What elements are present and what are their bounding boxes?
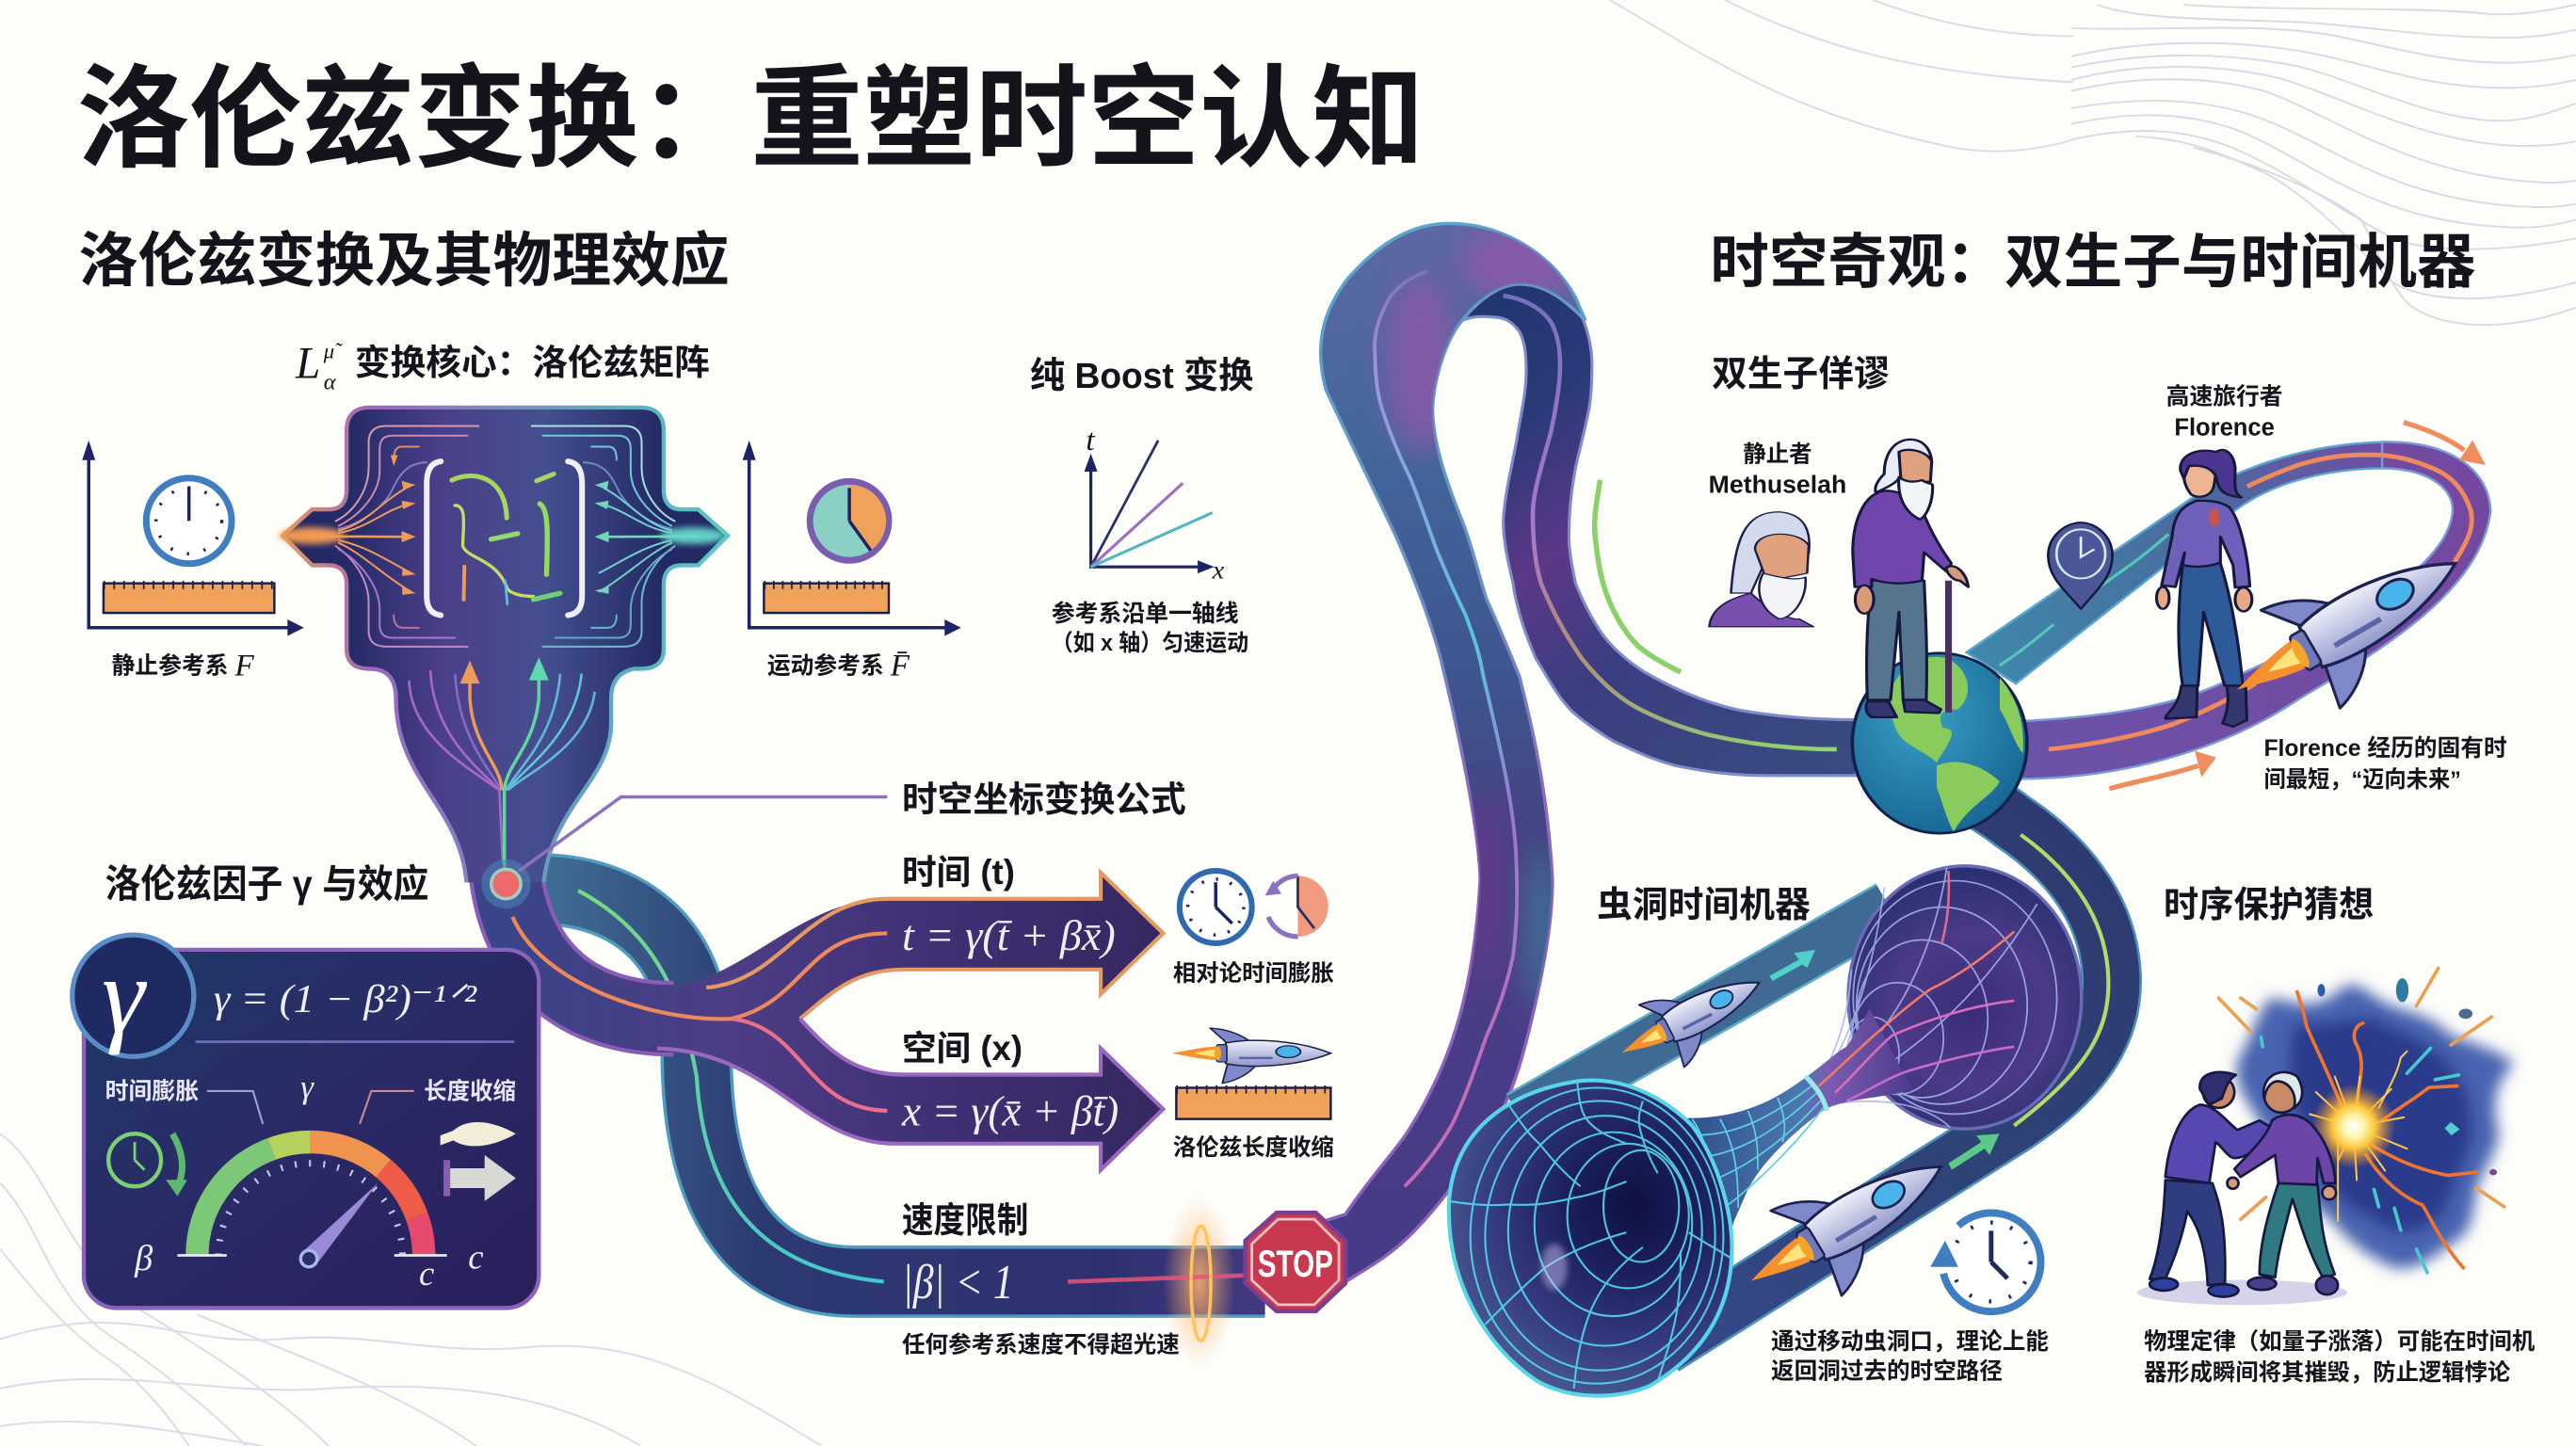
matrix entries xyxy=(452,474,560,604)
leader line xyxy=(519,797,887,871)
matrix heading: 变换核心：洛伦兹矩阵 xyxy=(355,343,710,382)
purple sheen on loop xyxy=(1385,227,1582,1010)
ruler ticks xyxy=(104,583,274,587)
light barrier xyxy=(1068,1197,1297,1367)
stop sign: STOP xyxy=(1258,1243,1333,1285)
gamma badge xyxy=(72,935,194,1056)
formula: γ = (1 − β²)⁻¹ᐟ² xyxy=(214,978,478,1021)
heading: twin paradox: 双生子佯谬 xyxy=(1712,355,1890,394)
explosion: shards xyxy=(2219,968,2504,1219)
left flow lines xyxy=(320,426,478,647)
axis labels: β xyxy=(134,1239,153,1278)
explosion: gold rays xyxy=(2310,1052,2407,1221)
axis labels: c xyxy=(419,1254,434,1293)
inner line: space xyxy=(731,1019,887,1111)
ribbon: return branch to globe xyxy=(1462,283,1857,776)
symbol F: F xyxy=(234,648,255,683)
stem teal line xyxy=(505,674,539,871)
note: Florence: 间最短，“迈向未来” xyxy=(2263,767,2461,793)
teal inner line xyxy=(2000,534,2168,666)
heading: coordinate transform: 时空坐标变换公式 xyxy=(902,779,1186,819)
wormhole note xyxy=(1771,1329,2049,1384)
rocket: lower tube xyxy=(1725,1124,1972,1332)
time arrow edge xyxy=(706,873,1163,1019)
glow xyxy=(1163,1197,1235,1367)
neck ring xyxy=(1806,1076,1827,1111)
label: 运动参考系 xyxy=(767,652,884,680)
label: speed limit: 速度限制 xyxy=(902,1200,1028,1240)
ribbon: front band and loop top xyxy=(1314,223,1586,1298)
boost panel xyxy=(1030,356,1253,656)
chronology note xyxy=(2144,1329,2536,1386)
arrow: green in lower tube xyxy=(1948,1133,2000,1170)
label: 静止参考系 xyxy=(112,652,229,680)
clock pin xyxy=(2048,522,2113,609)
head xyxy=(2184,460,2216,497)
green arc beside ribbon xyxy=(1595,480,1681,672)
axis arrowheads xyxy=(743,441,961,635)
panel: gamma factor xyxy=(72,935,539,1308)
spacetime diagram: t xyxy=(1086,423,1095,458)
heading: left section: 洛伦兹变换及其物理效应 xyxy=(79,228,730,294)
cream rocket xyxy=(441,1122,516,1146)
matrix heading: μ̃ xyxy=(323,340,343,363)
thin line: front band xyxy=(1375,271,1517,1186)
wormhole xyxy=(1449,866,2082,1396)
axis labels xyxy=(134,1237,484,1293)
chronology note: 器形成瞬间将其摧毁，防止逻辑悖论 xyxy=(2144,1360,2511,1386)
note: 参考系沿单一轴线 xyxy=(1052,600,1239,627)
divider xyxy=(196,1041,514,1043)
explosion: orange rays xyxy=(2297,991,2476,1268)
clock xyxy=(810,481,889,560)
gamma symbol: γ xyxy=(102,935,147,1055)
gamma label: γ xyxy=(300,1068,314,1105)
ruler ticks xyxy=(764,583,889,587)
clock ticks xyxy=(156,488,222,554)
right arm glow xyxy=(660,527,726,544)
axes xyxy=(749,450,950,628)
matrix heading: L xyxy=(295,339,320,388)
space arrow edge xyxy=(657,1019,1163,1170)
background contour lines: top centre xyxy=(1610,0,2073,152)
right flow lines xyxy=(532,426,697,647)
matrix funnel xyxy=(280,408,728,882)
inner lines xyxy=(512,917,887,1019)
far funnel grid xyxy=(1815,868,2057,1127)
leader left xyxy=(207,1091,263,1124)
wormhole: far funnel mouth xyxy=(1848,866,2082,1129)
needle xyxy=(300,1183,378,1267)
heading: 纯 Boost 变换 xyxy=(1030,356,1253,396)
stem arrowheads xyxy=(460,661,480,683)
return band xyxy=(1967,442,2386,683)
note: Florence xyxy=(2263,735,2507,793)
background contour lines: bottom left xyxy=(0,1133,821,1446)
arrow: time xyxy=(657,873,1163,1049)
axis labels: c xyxy=(468,1237,484,1276)
heading: wormhole: 虫洞时间机器 xyxy=(1597,886,1811,925)
boots xyxy=(2165,685,2246,727)
explosion with two figures xyxy=(2137,968,2514,1305)
funnel edge xyxy=(282,408,728,882)
label: traveller: Florence xyxy=(2174,413,2275,442)
arrow: lower orange xyxy=(2109,751,2216,789)
clock hands xyxy=(849,488,871,551)
note: Florence: Florence 经历的固有时 xyxy=(2263,735,2507,762)
Methuselah xyxy=(1853,440,1969,717)
arrow: upper orange xyxy=(2404,423,2486,465)
arm glows xyxy=(280,527,345,544)
leader right xyxy=(360,1091,414,1124)
Florence xyxy=(2156,450,2252,727)
thin line: return branch xyxy=(1504,296,1837,749)
note: speed limit: 任何参考系速度不得超光速 xyxy=(902,1331,1180,1358)
ring xyxy=(1191,1226,1211,1341)
length arrow xyxy=(443,1155,516,1201)
wormhole: near mouth xyxy=(1449,1081,1732,1396)
icon: clock with reverse arrow xyxy=(1930,1213,2041,1311)
frame: rest xyxy=(82,441,304,683)
label: stationary twin xyxy=(1709,442,1846,499)
label: time dilation: 时间膨胀 xyxy=(105,1079,199,1105)
explosion: teal sparks xyxy=(2261,1037,2458,1273)
sweater xyxy=(1853,490,1952,586)
near mouth grid xyxy=(1449,1082,1731,1389)
wormhole note: 通过移动虫洞口，理论上能 xyxy=(1771,1329,2049,1355)
panel background xyxy=(84,950,539,1308)
neck grid xyxy=(1676,1084,1824,1249)
caption: length contraction: 洛伦兹长度收缩 xyxy=(1173,1135,1334,1161)
title: 洛伦兹变换：重塑时空认知 xyxy=(77,58,1425,183)
icon: time dilation clocks xyxy=(1180,871,1328,943)
beam xyxy=(1068,1274,1297,1281)
continents xyxy=(1891,657,2023,831)
matrix interior in crop coordinates xyxy=(320,426,697,647)
shoes xyxy=(1866,699,1941,717)
clock xyxy=(146,478,232,564)
arrow: teal in upper tube xyxy=(1769,950,1815,981)
label: length contraction: 长度收缩 xyxy=(424,1079,516,1105)
arrow: space xyxy=(657,1003,1163,1170)
matrix heading: α xyxy=(324,370,337,395)
trunk and split arrows xyxy=(505,829,1163,1170)
stem orange line xyxy=(470,677,502,791)
icon: Methuselah portrait xyxy=(1709,512,1813,627)
symbol F bar: F̄ xyxy=(890,648,910,683)
clock wedge xyxy=(849,485,886,551)
label: stationary twin: 静止者 xyxy=(1743,442,1812,467)
hands xyxy=(2156,586,2169,609)
legs xyxy=(2179,563,2243,685)
trunk xyxy=(505,829,673,1019)
label: time: 时间 (t) xyxy=(902,853,1015,892)
rocket: upper tube xyxy=(1606,952,1778,1089)
hands xyxy=(1855,586,1874,614)
scene: twins on globe, in crop coordinates xyxy=(1852,440,2252,833)
explosion: inner cloud xyxy=(2291,1019,2471,1231)
ruler xyxy=(764,584,889,613)
note line 2: （如 x 轴）匀速运动 xyxy=(1052,631,1248,656)
chronology note: 物理定律（如量子涨落）可能在时间机 xyxy=(2144,1329,2536,1355)
trousers xyxy=(1867,581,1926,699)
ribbon: loop to Florence and back xyxy=(1967,442,2490,779)
clock hand xyxy=(188,487,190,521)
ribbon: big S loop xyxy=(1314,223,1857,1298)
small green clock xyxy=(108,1133,187,1197)
cane xyxy=(1941,581,1956,713)
heading: right section: 时空奇观：双生子与时间机器 xyxy=(1710,230,2476,296)
outgoing band xyxy=(2018,442,2490,779)
label: space: 空间 (x) xyxy=(902,1029,1022,1068)
formula: time: t = γ(t̄ + βx̄) xyxy=(902,912,1116,959)
label: stationary twin: Methuselah xyxy=(1709,471,1846,499)
stem flow lines xyxy=(409,670,595,862)
orange inner line xyxy=(2049,455,2471,749)
label: traveller: 高速旅行者 xyxy=(2166,383,2283,410)
ribbon: wormhole right tube to globe xyxy=(1663,789,2112,1346)
top xyxy=(2162,501,2250,587)
matrix heading xyxy=(295,339,710,395)
ribbon: wormhole upper tube xyxy=(1520,907,1890,1117)
explosion: core xyxy=(2311,1084,2396,1169)
formula: space: x = γ(x̄ + βt̄) xyxy=(901,1088,1119,1135)
frame: moving xyxy=(743,441,961,683)
formula: speed limit: |β| < 1 xyxy=(902,1255,1014,1309)
spacetime diagram xyxy=(1085,423,1225,585)
heading: gamma: 洛伦兹因子 γ 与效应 xyxy=(105,862,428,906)
ribbon: lower strand to speed limit xyxy=(534,889,1265,1281)
caption: time dilation: 相对论时间膨胀 xyxy=(1173,961,1334,987)
background contour lines: top right xyxy=(2071,5,2576,325)
hair xyxy=(2181,450,2242,497)
wormhole: neck xyxy=(1666,1009,1912,1232)
icon: rocket and ruler xyxy=(1172,1028,1330,1119)
heading: chronology protection: 时序保护猜想 xyxy=(2164,886,2374,925)
badge xyxy=(2209,508,2219,527)
face xyxy=(1899,450,1932,482)
node: origin xyxy=(481,860,531,908)
axes xyxy=(89,450,293,628)
gauge xyxy=(177,1142,447,1256)
hair xyxy=(1876,440,1932,492)
funnel fill xyxy=(282,408,728,882)
figure: older man xyxy=(2228,1072,2338,1294)
beard xyxy=(1899,477,1933,520)
wormhole note: 返回洞过去的时空路径 xyxy=(1771,1358,2003,1384)
explosion: floating pieces xyxy=(2317,978,2497,1176)
far funnel coloured lines xyxy=(1819,871,2014,1101)
axis arrowheads xyxy=(82,441,304,635)
left arrowheads xyxy=(391,455,416,595)
ruler xyxy=(104,584,274,613)
label: traveller xyxy=(2166,383,2283,442)
matrix brackets xyxy=(427,461,582,615)
stem teal arrowhead xyxy=(529,657,549,681)
shadow xyxy=(2137,1280,2347,1305)
figure: younger man xyxy=(2149,1072,2275,1297)
globe xyxy=(1852,653,2027,833)
stop sign xyxy=(1246,1213,1345,1311)
rocket: Florence xyxy=(2209,514,2489,748)
explosion: cloud xyxy=(2237,985,2514,1268)
spacetime diagram: x xyxy=(1212,555,1225,585)
right arrowheads xyxy=(595,481,609,594)
near mouth sparkle xyxy=(1541,1244,1568,1290)
